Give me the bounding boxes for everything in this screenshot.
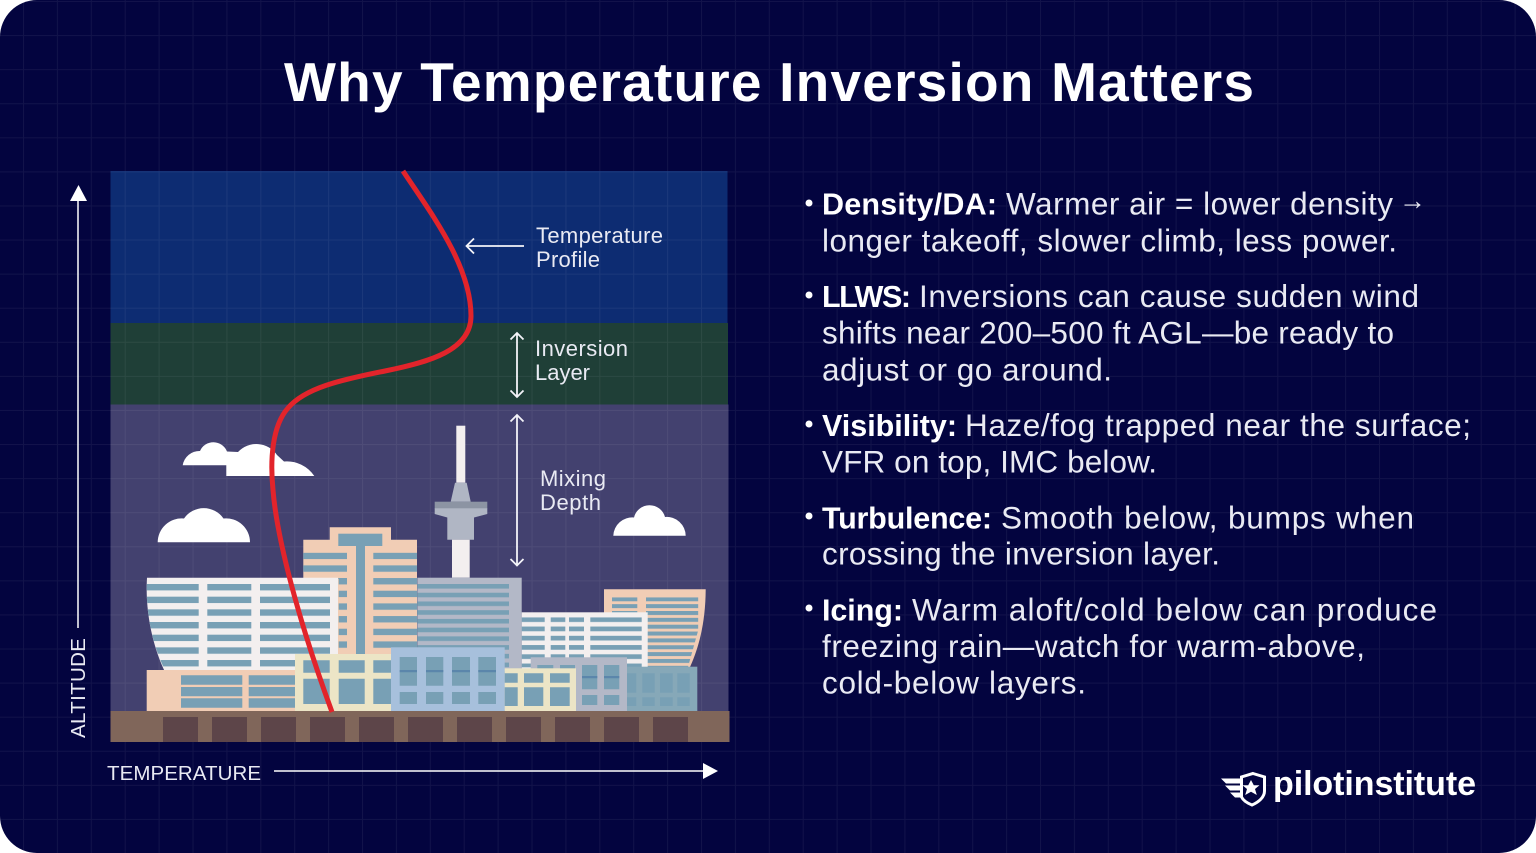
illustration: city skyline xyxy=(110,426,730,742)
text block: icing xyxy=(806,592,1437,700)
wordmark: pilotinstitute xyxy=(1273,765,1476,803)
text block: visibility: Haze/fog trapped near the surface; xyxy=(965,407,1471,443)
icon: cloud right xyxy=(613,505,686,536)
icon: winged shield xyxy=(1221,774,1264,805)
text block: turbulence xyxy=(806,500,1414,572)
text block: icing: Warm aloft/cold below can produce xyxy=(912,592,1437,628)
label: temperature profile: Temperature xyxy=(536,223,663,248)
text block: visibility: VFR on top, IMC below. xyxy=(822,444,1157,480)
building: grey slab xyxy=(417,578,522,711)
arrow: mixing depth extent xyxy=(510,415,524,566)
building: white curved block xyxy=(140,578,338,674)
arrow: temperature profile pointer xyxy=(466,238,524,254)
building: peach tower xyxy=(303,527,417,660)
label: inversion layer: Layer xyxy=(535,360,590,385)
arrow: altitude axis xyxy=(70,185,87,628)
building: grey low block xyxy=(531,657,627,711)
building: teal block xyxy=(627,667,697,711)
label: mixing depth: Mixing xyxy=(540,466,606,491)
icon: cloud upper left xyxy=(183,442,238,465)
text block: turbulence: Turbulence: xyxy=(822,502,992,536)
label: inversion layer: Inversion xyxy=(535,336,628,361)
building: blue block xyxy=(391,647,505,711)
text block: density: Density/DA: xyxy=(822,188,997,222)
icon: cloud upper middle xyxy=(226,444,314,476)
building: cream block right xyxy=(505,668,576,711)
arrow: inversion layer extent xyxy=(510,333,524,397)
text block: icing: freezing rain—watch for warm-above, xyxy=(822,628,1365,664)
text block: visibility xyxy=(806,407,1471,480)
text block: icing: Icing: xyxy=(822,594,903,628)
building: observation tower xyxy=(435,426,487,578)
panel: atmosphere layers xyxy=(110,171,728,712)
text block: density xyxy=(806,186,1426,258)
logo: pilot institute xyxy=(1221,765,1476,805)
text block: density: → xyxy=(1399,186,1426,216)
arrow: temperature axis xyxy=(274,763,718,779)
building: peach curved block right xyxy=(604,589,706,667)
icon: cloud lower left xyxy=(158,508,250,542)
text block: LLWS xyxy=(806,278,1419,388)
text block: icing: cold-below layers. xyxy=(822,664,1086,700)
text block: density: longer takeoff, slower climb, less power. xyxy=(822,222,1397,258)
label: temperature profile: Profile xyxy=(536,247,600,272)
label: inversion layer xyxy=(535,336,628,385)
label: mixing depth: Depth xyxy=(540,490,601,515)
label: mixing depth xyxy=(540,466,606,515)
label: temperature axis: TEMPERATURE xyxy=(107,762,261,785)
title: Why Temperature Inversion Matters xyxy=(284,51,1254,113)
text block: visibility: Visibility: xyxy=(822,409,957,443)
text block: LLWS: shifts near 200–500 ft AGL—be ready to xyxy=(822,314,1394,350)
ground with blocks xyxy=(110,711,730,742)
text block: turbulence: crossing the inversion layer. xyxy=(822,536,1220,572)
building: cream block left xyxy=(295,654,391,711)
text block: density: Warmer air = lower density xyxy=(1006,186,1393,222)
text block: LLWS: Inversions can cause sudden wind xyxy=(919,278,1419,314)
building: low peach podium xyxy=(147,670,297,711)
label: altitude axis: ALTITUDE xyxy=(67,638,90,738)
text block: LLWS: LLWS: xyxy=(822,280,911,314)
label: temperature profile xyxy=(536,223,663,272)
chart line: temperature profile xyxy=(272,171,471,712)
text block: turbulence: Smooth below, bumps when xyxy=(1001,500,1414,536)
text block: LLWS: adjust or go around. xyxy=(822,352,1112,388)
building: white low block right xyxy=(522,612,648,670)
